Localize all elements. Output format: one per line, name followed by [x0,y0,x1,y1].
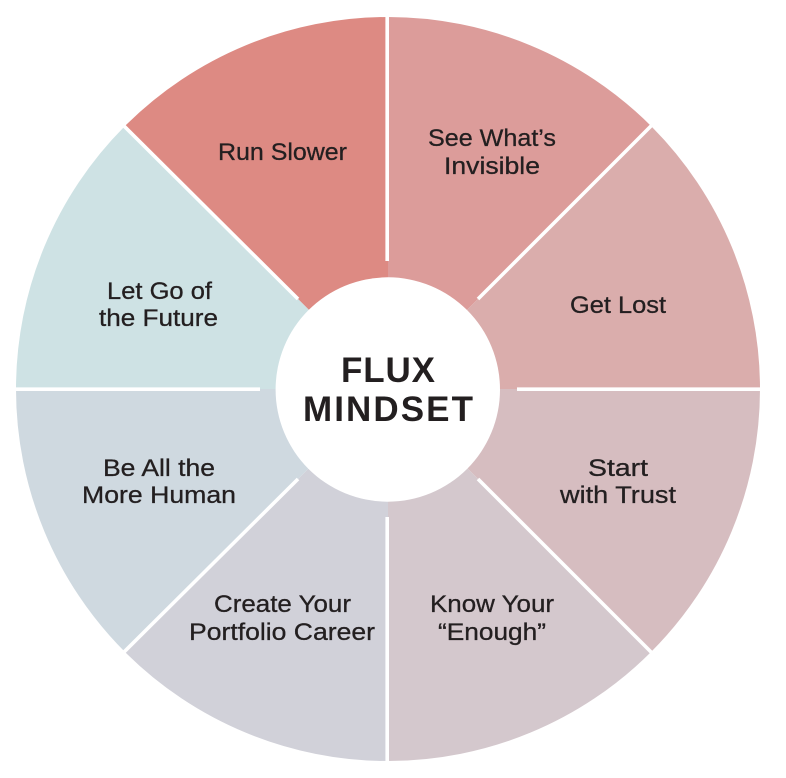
panel: Start with Trust [388,389,760,652]
title line: FLUX: FLUX [341,351,436,390]
panel: Know Your Enough [388,389,651,761]
panel: Let Go of the Future [16,126,388,389]
panel: Be All the More Human: Be All the [103,455,215,482]
panel: Start with Trust: Start [588,455,648,482]
panel: Let Go of the Future: Let Go of [107,278,212,305]
title line: MINDSET: MINDSET [303,390,473,429]
panel: Create Your Portfolio Career: Portfolio Career [189,619,375,646]
panel: Start with Trust: with Trust [559,482,676,509]
panel: Let Go of the Future: the Future [99,305,218,332]
panel: Create Your Portfolio Career [125,389,388,761]
panel: Get Lost [388,126,760,389]
panel: Be All the More Human [16,389,388,652]
panel: See What's Invisible: See What’s [428,125,556,152]
panel: Know Your Enough: “Enough” [438,619,546,646]
panel: Run Slower [125,17,388,389]
panel: Create Your Portfolio Career: Create Your [214,591,351,618]
panel: See What's Invisible [388,17,651,389]
panel: Run Slower: Run Slower [218,139,347,166]
panel: Be All the More Human: More Human [82,482,236,509]
panel: See What's Invisible: Invisible [444,153,540,180]
center hub: Flux Mindset [276,277,500,502]
panel: Get Lost: Get Lost [570,292,666,319]
panel: Know Your Enough: Know Your [430,591,554,618]
